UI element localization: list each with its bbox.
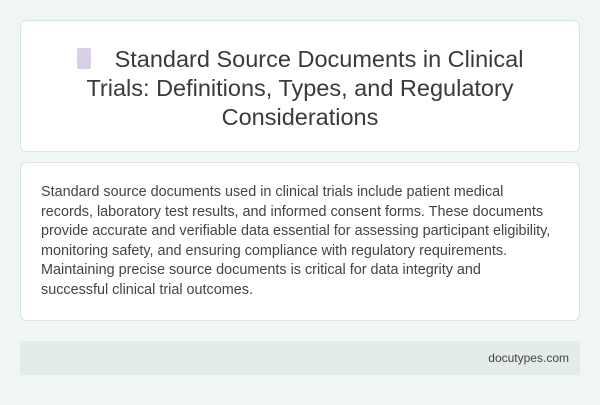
description text: monitoring safety, and ensuring compliance with regulatory requirements. — [41, 242, 507, 258]
footer: docutypes.com — [488, 351, 569, 365]
title: Standard Source Documents in Clinical — [115, 46, 523, 72]
description text: successful clinical trial outcomes. — [41, 282, 253, 298]
description text: Maintaining precise source documents is critical for data integrity and — [41, 262, 481, 278]
description text — [41, 184, 550, 298]
icon: document — [77, 48, 91, 69]
description text: records, laboratory test results, and informed consent forms. These documents — [41, 204, 543, 220]
description text: provide accurate and verifiable data essential for assessing participant eligibility, — [41, 223, 550, 239]
description card — [20, 162, 580, 321]
title card — [20, 20, 580, 152]
title — [77, 46, 523, 130]
description text: Standard source documents used in clinical trials include patient medical — [41, 184, 503, 200]
title: Considerations — [222, 104, 378, 130]
title: Trials: Definitions, Types, and Regulatory — [86, 75, 514, 101]
footer — [20, 341, 580, 375]
